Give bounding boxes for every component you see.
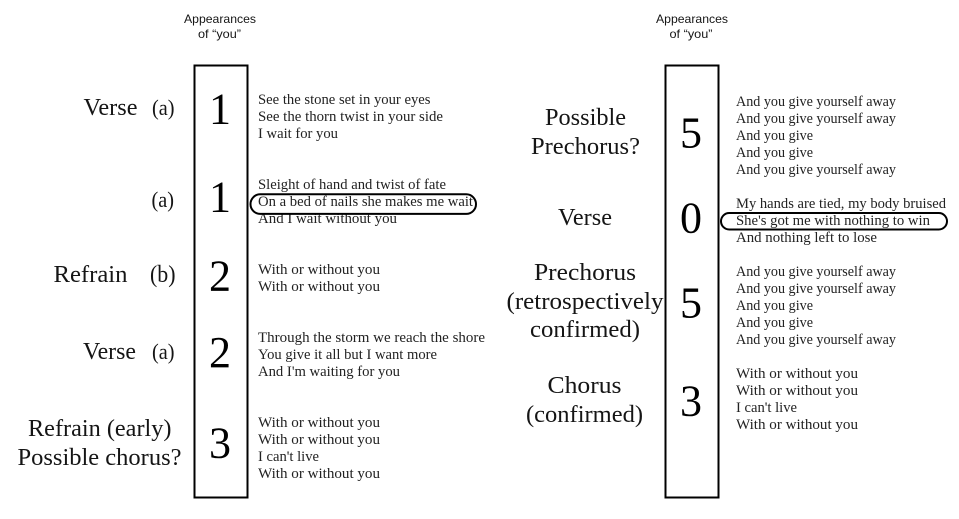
right lyrics: With or without you [736, 366, 859, 382]
left lyrics: I can't live [258, 449, 319, 465]
left section labels: Verse [83, 339, 136, 365]
left lyrics: And I'm waiting for you [258, 364, 401, 380]
left section labels: (a) [152, 95, 174, 120]
left counts: 1 [209, 172, 231, 222]
left column heading: Appearances [184, 12, 256, 26]
right lyrics: I can't live [736, 400, 797, 416]
left lyrics: With or without you [258, 432, 381, 448]
left section labels: Verse [84, 95, 138, 121]
right section labels: Prechorus [534, 260, 636, 286]
right lyrics: And you give [736, 145, 813, 161]
left lyrics: And I wait without you [258, 211, 398, 227]
left lyrics: With or without you [258, 279, 381, 295]
left lyrics [258, 92, 485, 482]
left counts [209, 84, 231, 468]
right lyrics: And you give yourself away [736, 332, 897, 348]
right counts: 5 [680, 108, 702, 158]
right lyrics: And you give [736, 315, 813, 331]
left section labels: (a) [152, 339, 174, 364]
right section labels: Prechorus? [531, 134, 640, 160]
right lyrics: And nothing left to lose [736, 230, 877, 246]
right column heading: Appearances [656, 12, 728, 26]
right lyrics: And you give yourself away [736, 111, 897, 127]
right callout oval [721, 213, 947, 230]
right column heading: of “you” [670, 27, 712, 41]
right section labels: Possible [545, 105, 626, 131]
right section labels: Verse [558, 205, 612, 231]
left count box [194, 66, 248, 498]
right lyrics: And you give [736, 128, 813, 144]
left lyrics: Sleight of hand and twist of fate [258, 177, 446, 193]
right lyrics: She's got me with nothing to win [736, 213, 931, 229]
right column heading [656, 12, 728, 41]
right section labels: confirmed) [530, 317, 640, 343]
left counts: 3 [209, 418, 231, 468]
right section labels: (retrospectively [506, 289, 664, 315]
right counts [680, 108, 702, 426]
left section labels: Possible chorus? [18, 445, 182, 471]
left section labels: (a) [152, 187, 174, 212]
left column heading [184, 12, 256, 41]
right count box [666, 66, 718, 498]
left counts: 2 [209, 328, 231, 377]
right section labels: (confirmed) [526, 402, 643, 428]
right counts: 0 [680, 194, 702, 242]
left lyrics: With or without you [258, 262, 381, 278]
left column heading: of “you” [198, 27, 241, 41]
left lyrics: You give it all but I want more [258, 347, 437, 363]
left lyrics: I wait for you [258, 126, 339, 142]
right lyrics: And you give yourself away [736, 264, 897, 280]
left lyrics: With or without you [258, 466, 381, 482]
right lyrics: And you give yourself away [736, 162, 897, 178]
left lyrics: On a bed of nails she makes me wait [258, 194, 473, 210]
left lyrics: See the thorn twist in your side [258, 109, 443, 125]
left lyrics: See the stone set in your eyes [258, 92, 431, 108]
left section labels: (b) [150, 262, 176, 288]
right lyrics: With or without you [736, 417, 859, 433]
left counts: 2 [209, 252, 231, 300]
left counts: 1 [209, 84, 231, 134]
right section labels: Chorus [548, 373, 622, 399]
left section labels: Refrain (early) [28, 416, 172, 442]
left lyrics: With or without you [258, 415, 381, 431]
right lyrics: My hands are tied, my body bruised [736, 196, 947, 212]
right lyrics [736, 94, 947, 433]
right lyrics: And you give [736, 298, 813, 314]
right counts: 3 [680, 376, 702, 426]
left section labels: Refrain [54, 262, 128, 288]
left callout oval [250, 194, 476, 214]
right lyrics: With or without you [736, 383, 859, 399]
right counts: 5 [680, 278, 702, 328]
left lyrics: Through the storm we reach the shore [258, 330, 485, 346]
right lyrics: And you give yourself away [736, 94, 897, 110]
left section labels [18, 95, 182, 471]
right lyrics: And you give yourself away [736, 281, 897, 297]
right section labels [506, 105, 664, 428]
